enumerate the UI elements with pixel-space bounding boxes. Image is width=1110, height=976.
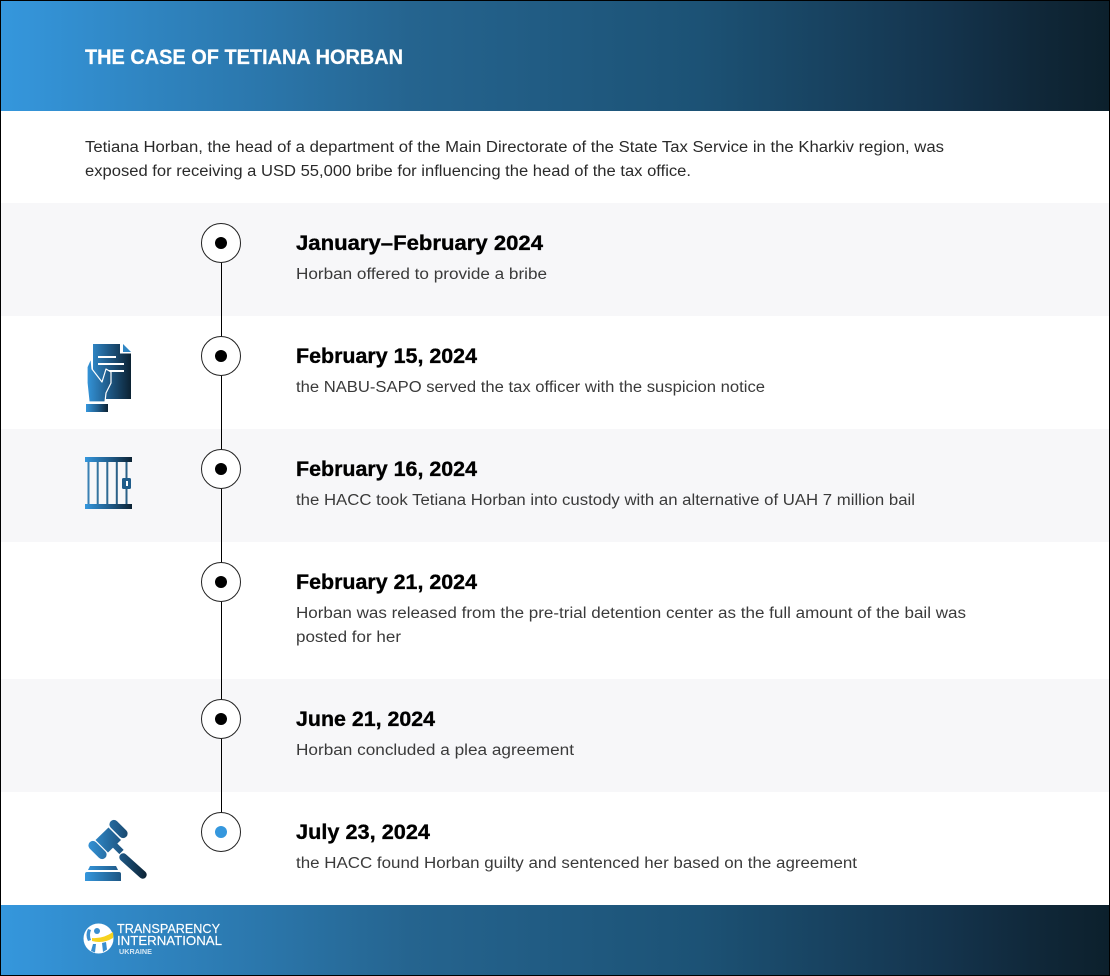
event: February 15, 2024: February 15, 2024 [296,345,477,368]
event: February 16, 2024: the HACC took Tetiana Horban into custody with an alternative of UAH 7 million bail [296,492,915,509]
event: January–February 2024 [202,224,547,283]
intro text [85,139,944,180]
event: February 21, 2024: February 21, 2024 [296,571,477,594]
footer band [0,905,1110,975]
timeline line [221,243,222,832]
event: February 21, 2024 [202,562,966,646]
logo: Transparency International Ukraine [84,922,222,956]
event: February 16, 2024: February 16, 2024 [296,458,477,481]
icon: gavel [85,824,143,881]
event: January–February 2024: Horban offered to provide a bribe [296,266,547,283]
event: July 23, 2024: July 23, 2024 [296,821,430,844]
intro text: exposed for receiving a USD 55,000 bribe for influencing the head of the tax office. [85,163,691,180]
event: February 21, 2024: Horban was released from the pre-trial detention center as the full amount of the bail was [296,605,966,622]
title: THE CASE OF TETIANA HORBAN [85,46,403,69]
logo: Transparency International Ukraine: INTERNATIONAL [117,934,222,948]
event: February 15, 2024 [202,336,765,396]
event: January–February 2024: January–February 2024 [296,232,543,255]
event: June 21, 2024: Horban concluded a plea agreement [296,742,575,759]
event: June 21, 2024: June 21, 2024 [296,708,435,731]
event: July 23, 2024: the HACC found Horban guilty and sentenced her based on the agreement [296,855,858,872]
row backgrounds [0,203,1110,792]
event: July 23, 2024 [202,812,858,872]
logo: Transparency International Ukraine: UKRAINE [119,949,152,956]
logo: Transparency International Ukraine: TRANSPARENCY [117,922,221,936]
icon: prison bars [85,457,132,509]
header band [0,0,1110,111]
event: February 16, 2024 [202,450,915,509]
event: February 21, 2024: posted for her [296,629,401,646]
icon: hand holding document [86,344,131,412]
event: February 15, 2024: the NABU-SAPO served the tax officer with the suspicion notice [296,379,765,396]
intro text: Tetiana Horban, the head of a department of the Main Directorate of the State Tax Service in the Kharkiv region, was [85,139,944,156]
event: June 21, 2024 [202,700,575,759]
